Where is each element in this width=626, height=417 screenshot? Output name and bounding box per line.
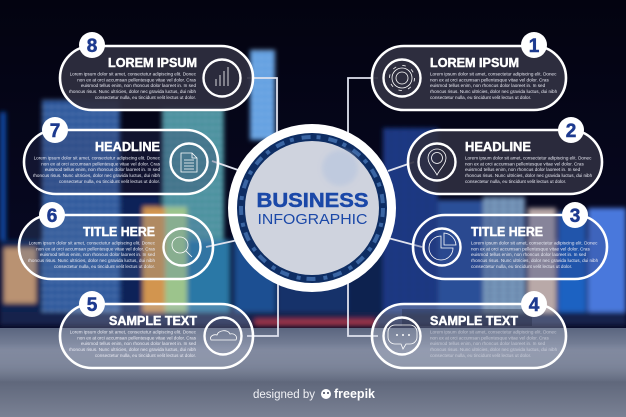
body text: non ex at orci accumsan pellentesque vitae vel dolor. Cras <box>465 162 584 166</box>
panel 1: lorem ipsum <box>372 46 566 110</box>
body text: Lorem ipsum dolor sit amet, consectetur adipiscing elit. Donec <box>465 156 592 160</box>
icon: freepik logo <box>321 389 331 399</box>
panel 3: title here <box>413 215 607 279</box>
body text: Lorem ipsum dolor sit amet, consectetur adipiscing elit. Donec <box>471 240 598 246</box>
badge 7 <box>42 117 68 143</box>
heading: HEADLINE <box>465 140 531 154</box>
heading: SAMPLE TEXT <box>109 314 197 328</box>
badge 6: 6 <box>47 206 57 227</box>
body text: euismod tellus enim, non rhoncus dolor laoreet in. In sed <box>430 341 546 346</box>
body text: Lorem ipsum dolor sit amet, consectetur adipiscing elit. Donec <box>70 330 197 334</box>
body text: consectetur nulla, eu tincidunt velit lectus ut dolor. <box>471 264 572 269</box>
body text: consectetur nulla, eu tincidunt velit lectus ut dolor. <box>95 353 196 358</box>
icon: map pin <box>418 144 456 180</box>
body text: non ex at orci accumsan pellentesque vitae vel dolor. Cras <box>77 336 197 340</box>
panel 6: title here <box>19 215 213 279</box>
badge 4 <box>521 291 547 317</box>
title: INFOGRAPHIC <box>258 212 368 228</box>
body text: euismod tellus enim, non rhoncus dolor laoreet in. In sed <box>81 83 196 88</box>
badge 5: 5 <box>87 295 98 316</box>
icon: pie chart <box>424 228 460 266</box>
icon: bar chart <box>204 60 240 96</box>
badge 5 <box>79 291 105 317</box>
body text: Lorem ipsum dolor sit amet, consectetur adipiscing elit. Donec <box>430 72 557 76</box>
badge 3: 3 <box>570 206 580 227</box>
heading: LOREM IPSUM <box>108 56 197 70</box>
body text: consectetur nulla, eu tincidunt velit lectus ut dolor. <box>54 264 155 269</box>
body text <box>69 330 197 358</box>
body text <box>471 240 599 269</box>
body text: consectetur nulla, eu tincidunt velit lectus ut dolor. <box>465 179 566 184</box>
body text: non ex at orci accumsan pellentesque vitae vel dolor. Cras <box>430 78 549 82</box>
footer credit <box>253 387 375 401</box>
body text: non ex at orci accumsan pellentesque vitae vel dolor. Cras <box>430 336 549 340</box>
body text: euismod tellus enim, non rhoncus dolor laoreet in. In sed <box>45 167 160 172</box>
body text: consectetur nulla, eu tincidunt velit lectus ut dolor. <box>95 95 196 100</box>
body text <box>28 240 156 269</box>
connector lines <box>206 78 422 336</box>
heading: LOREM IPSUM <box>430 56 519 70</box>
body text: non ex at orci accumsan pellentesque vitae vel dolor. Cras <box>471 246 590 252</box>
body text <box>430 330 558 358</box>
body text: euismod tellus enim, non rhoncus dolor laoreet in. In sed <box>81 341 196 346</box>
panel 5: sample text <box>60 304 253 368</box>
icon: gear <box>384 60 420 96</box>
body text: rhoncus risus. Nunc ultricies, dolor nec gravida luctus, dui nibh <box>33 173 160 178</box>
title: BUSINESS <box>256 190 368 212</box>
heading: SAMPLE TEXT <box>430 314 518 328</box>
body text <box>465 156 593 184</box>
body text: euismod tellus enim, non rhoncus dolor laoreet in. In sed <box>471 252 587 257</box>
body text: euismod tellus enim, non rhoncus dolor laoreet in. In sed <box>430 83 546 88</box>
body text: consectetur nulla, eu tincidunt velit lectus ut dolor. <box>430 95 531 100</box>
body text: rhoncus risus. Nunc ultricies, dolor nec gravida luctus, dui nibh <box>28 258 155 263</box>
body text: non ex at orci accumsan pellentesque vitae vel dolor. Cras <box>41 162 161 166</box>
heading: TITLE HERE <box>83 225 155 239</box>
badge 1 <box>521 32 547 58</box>
heading: TITLE HERE <box>471 225 543 239</box>
panel 7: headline <box>24 130 218 194</box>
badge 8: 8 <box>87 36 97 57</box>
panel 2: headline <box>408 130 602 194</box>
body text: Lorem ipsum dolor sit amet, consectetur adipiscing elit. Donec <box>430 330 557 334</box>
badge 3 <box>562 202 588 228</box>
body text: rhoncus risus. Nunc ultricies, dolor nec gravida luctus, dui nibh <box>430 89 558 94</box>
badge 2 <box>558 117 584 143</box>
body text <box>33 156 161 184</box>
badge 4: 4 <box>529 295 540 316</box>
body text: rhoncus risus. Nunc ultricies, dolor nec gravida luctus, dui nibh <box>465 173 593 178</box>
body text <box>69 72 197 100</box>
footer credit: designed by <box>253 389 315 401</box>
body text <box>430 72 558 100</box>
badge 6 <box>39 202 65 228</box>
badge 8 <box>79 32 105 58</box>
body text: non ex at orci accumsan pellentesque vitae vel dolor. Cras <box>36 246 156 252</box>
body text: rhoncus risus. Nunc ultricies, dolor nec gravida luctus, dui nibh <box>471 258 599 263</box>
footer credit: freepik <box>334 387 375 401</box>
badge 2: 2 <box>566 121 576 142</box>
body text: rhoncus risus. Nunc ultricies, dolor nec gravida luctus, dui nibh <box>69 89 196 94</box>
body text: Lorem ipsum dolor sit amet, consectetur adipiscing elit. Donec <box>34 156 161 160</box>
body text: consectetur nulla, eu tincidunt velit lectus ut dolor. <box>430 353 531 358</box>
body text: rhoncus risus. Nunc ultricies, dolor nec gravida luctus, dui nibh <box>430 347 558 352</box>
badge 1: 1 <box>529 36 540 57</box>
center circle <box>232 128 392 288</box>
body text: euismod tellus enim, non rhoncus dolor laoreet in. In sed <box>40 252 155 257</box>
title <box>256 190 368 228</box>
body text: euismod tellus enim, non rhoncus dolor laoreet in. In sed <box>465 167 581 172</box>
heading: HEADLINE <box>95 140 160 154</box>
icon: magnifier <box>164 228 200 266</box>
body text: Lorem ipsum dolor sit amet, consectetur adipiscing elit. Donec <box>29 240 156 246</box>
body text: Lorem ipsum dolor sit amet, consectetur adipiscing elit. Donec <box>70 72 197 76</box>
body text: consectetur nulla, eu tincidunt velit lectus ut dolor. <box>59 179 160 184</box>
badge 7: 7 <box>50 121 60 142</box>
panel 4: sample text <box>372 304 566 368</box>
panel 8: lorem ipsum <box>60 46 253 110</box>
icon: cloud <box>204 318 242 354</box>
icon: document <box>170 144 208 180</box>
icon: speech bubble <box>384 318 420 354</box>
body text: non ex at orci accumsan pellentesque vitae vel dolor. Cras <box>77 78 197 82</box>
body text: rhoncus risus. Nunc ultricies, dolor nec gravida luctus, dui nibh <box>69 347 196 352</box>
